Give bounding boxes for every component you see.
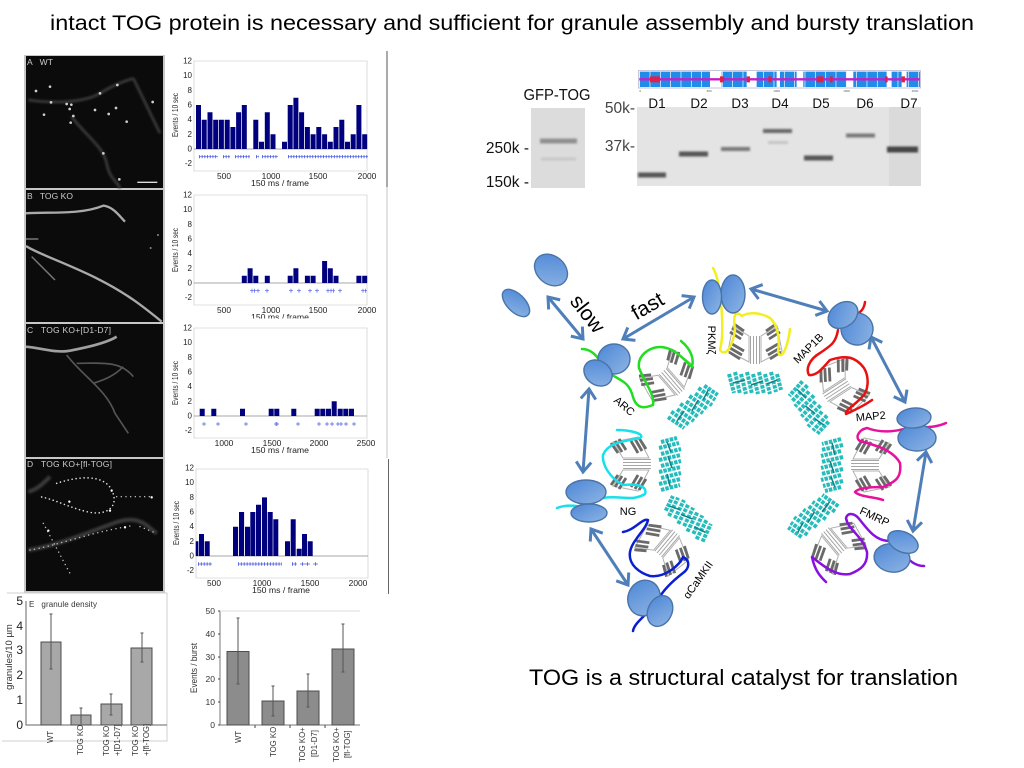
gel: GFP-TOG: GFP-TOG — [524, 87, 590, 104]
TOG dimer structures — [611, 324, 891, 581]
chart C: TOG KO+[D1-D7] events: 1000 — [215, 438, 234, 448]
mRNA labels: FMRP — [858, 505, 891, 529]
chart A: WT events: 6 — [188, 100, 193, 110]
chart D: TOG KO+[fl-TOG] events: 500 — [207, 578, 221, 588]
rate labels: fast — [627, 288, 668, 325]
micrograph B: TOG KO — [26, 190, 163, 322]
title: intact TOG protein is necessary and sufficient for granule assembly and bursty translation — [50, 12, 974, 35]
chart D: TOG KO+[fl-TOG] events: 6 — [190, 508, 195, 516]
diagram: TOG catalytic cycle — [498, 248, 946, 631]
rate labels: slow — [565, 290, 610, 338]
chart D: TOG KO+[fl-TOG] events: 0 — [190, 552, 195, 560]
domain map bar: 1500 — [843, 89, 850, 93]
chart A: WT events: 2 — [188, 130, 193, 139]
gel: domains D1-D7: D4 — [771, 96, 789, 111]
ribosome subunits — [498, 248, 936, 631]
micrograph D: TOG KO+[fl-TOG]: D TOG KO+[fl-TOG] — [27, 459, 112, 469]
chart E: granule density: 4 — [16, 619, 23, 633]
gel: domains D1-D7: 37k- — [605, 138, 635, 155]
domain map bar: 500 — [707, 89, 712, 93]
chart F: events per burst: 50 — [206, 606, 215, 616]
micrograph C: TOG KO+[D1-D7] — [26, 324, 163, 457]
chart A: WT events: 12 — [183, 56, 193, 66]
micrograph C: TOG KO+[D1-D7]: C TOG KO+[D1-D7] — [27, 325, 111, 335]
chart B: TOG KO events: 150 ms / frame — [251, 312, 309, 322]
chart A: WT events: -2 — [185, 159, 193, 168]
gel: domains D1-D7: D1 — [648, 96, 666, 111]
chart D: TOG KO+[fl-TOG] events: 2000 — [349, 578, 368, 588]
gel: domains D1-D7: D6 — [856, 96, 874, 111]
gel: domains D1-D7: D5 — [812, 96, 830, 111]
chart F: events per burst: WT — [234, 731, 243, 743]
chart C: TOG KO+[D1-D7] events: 12 — [183, 324, 193, 332]
chart D: TOG KO+[fl-TOG] events: 2 — [190, 537, 195, 546]
rate labels — [565, 288, 668, 338]
chart B: TOG KO events: 8 — [188, 220, 193, 229]
domain map bar — [638, 71, 921, 93]
chart E: granule density — [2, 593, 167, 756]
mRNA: NG — [557, 430, 645, 508]
micrograph B: TOG KO: B TOG KO — [27, 191, 73, 201]
chart A: WT events: 1000 — [262, 171, 281, 181]
chart E: granule density: 1 — [16, 693, 23, 707]
chart F: events per burst: 30 — [206, 652, 215, 662]
chart D: TOG KO+[fl-TOG] events: 1000 — [253, 578, 272, 588]
mRNA: αCaMKII — [623, 520, 688, 631]
chart B: TOG KO events: 1500 — [309, 305, 328, 315]
chart A: WT events: 8 — [188, 86, 193, 95]
chart E: granule density: +[D1-D7] — [113, 725, 122, 756]
chart A: WT events: 4 — [188, 115, 193, 124]
chart B: TOG KO events: 0 — [188, 278, 193, 288]
chart A: WT events: 0 — [188, 144, 193, 154]
chart E: granule density: +[fl-TOG] — [142, 724, 151, 756]
divider lines — [386, 51, 388, 187]
chart F: events per burst: 20 — [206, 674, 215, 684]
chart B: TOG KO events: 1000 — [262, 305, 281, 315]
micrograph D: TOG KO+[fl-TOG] — [26, 459, 163, 591]
chart F: events per burst: TOG KO — [269, 727, 278, 757]
chart E: granule density: TOG KO — [102, 726, 111, 756]
mRNA: PKMζ — [713, 268, 790, 355]
gel: GFP-TOG: 250k - — [486, 140, 529, 157]
chart C: TOG KO+[D1-D7] events: 0 — [188, 412, 193, 420]
chart B: TOG KO events — [171, 190, 377, 326]
chart F: events per burst: 10 — [206, 697, 215, 707]
caption: TOG is a structural catalyst for translation — [529, 665, 958, 690]
chart F: events per burst: TOG KO+ — [332, 727, 341, 762]
chart C: TOG KO+[D1-D7] events: 8 — [188, 353, 193, 362]
chart A: WT events: 150 ms / frame — [251, 178, 309, 188]
chart B: TOG KO events: Events / 10 sec — [171, 228, 180, 272]
mRNA: ARC — [582, 341, 693, 407]
gel: GFP-TOG: 150k - — [486, 174, 529, 191]
chart A: WT events: Events / 10 sec — [171, 93, 180, 137]
chart C: TOG KO+[D1-D7] events: 2000 — [310, 438, 329, 448]
mRNA: FMRP — [812, 514, 924, 582]
chart B: TOG KO events: 4 — [188, 249, 193, 258]
chart C: TOG KO+[D1-D7] events: -2 — [185, 426, 193, 435]
chart C: TOG KO+[D1-D7] events: 6 — [188, 368, 193, 376]
chart D: TOG KO+[fl-TOG] events: 10 — [185, 478, 195, 487]
chart D: TOG KO+[fl-TOG] events: 150 ms / frame — [252, 585, 310, 595]
chart E: granule density: E granule density — [29, 600, 97, 609]
micrograph A: WT: A WT — [27, 57, 53, 67]
gel: domains D1-D7 — [605, 96, 921, 186]
chart C: TOG KO+[D1-D7] events: 2 — [188, 397, 193, 406]
chart C: TOG KO+[D1-D7] events: 4 — [188, 382, 193, 391]
chart D: TOG KO+[fl-TOG] events: Events / 10 sec — [172, 501, 181, 545]
mRNA labels: MAP2 — [855, 410, 886, 424]
chart A: WT events: 10 — [183, 71, 193, 80]
chart B: TOG KO events: 6 — [188, 234, 193, 244]
chart E: granule density: 5 — [16, 594, 23, 608]
chart D: TOG KO+[fl-TOG] events: 4 — [190, 522, 195, 531]
chart F: events per burst: [fl-TOG] — [343, 730, 352, 758]
gel: domains D1-D7: D3 — [731, 96, 749, 111]
mRNA labels: NG — [620, 506, 636, 518]
chart C: TOG KO+[D1-D7] events: 2500 — [357, 438, 376, 448]
chart B: TOG KO events: 2 — [188, 264, 193, 273]
chart B: TOG KO events: 10 — [183, 205, 193, 214]
chart C: TOG KO+[D1-D7] events: Events / 10 sec — [171, 361, 180, 405]
chart C: TOG KO+[D1-D7] events: 1500 — [263, 438, 282, 448]
chart E: granule density: 2 — [16, 668, 23, 682]
mRNA labels: MAP1B — [791, 331, 826, 366]
mRNA: MAP1B — [808, 302, 872, 414]
chart D: TOG KO+[fl-TOG] events: 12 — [185, 464, 195, 472]
chart B: TOG KO events: 500 — [217, 305, 231, 315]
chart D: TOG KO+[fl-TOG] events: -2 — [187, 566, 195, 575]
mRNA: MAP2 — [855, 423, 946, 500]
chart D: TOG KO+[fl-TOG] events: 1500 — [301, 578, 320, 588]
chart E: granule density: WT — [46, 731, 55, 743]
chart A: WT events: 2000 — [358, 171, 377, 181]
domain map bar: 1000 — [773, 89, 780, 93]
chart C: TOG KO+[D1-D7] events: 150 ms / frame — [251, 445, 309, 455]
mRNA labels: αCaMKII — [681, 559, 716, 601]
mRNA labels — [611, 326, 891, 601]
chart B: TOG KO events: 12 — [183, 190, 193, 200]
chart A: WT events: 500 — [217, 171, 231, 181]
domain map bar: 0 — [639, 89, 641, 93]
chart D: TOG KO+[fl-TOG] events: 8 — [190, 493, 195, 502]
chart F: events per burst: 0 — [210, 720, 215, 730]
chart E: granule density: 0 — [16, 718, 23, 732]
mRNA labels: ARC — [611, 395, 637, 419]
chart A: WT events — [171, 56, 377, 188]
domain map bar: 2000 — [912, 89, 919, 93]
chart F: events per burst: [D1-D7] — [310, 730, 319, 757]
chart F: events per burst — [189, 606, 360, 762]
chart E: granule density: granules/10 µm — [4, 624, 15, 690]
micrograph A: WT — [26, 56, 163, 188]
gel: GFP-TOG — [486, 87, 590, 191]
chart C: TOG KO+[D1-D7] events — [171, 324, 376, 455]
chart B: TOG KO events: 2000 — [358, 305, 377, 315]
chart E: granule density: 3 — [16, 643, 23, 657]
arrows between granule states — [548, 289, 926, 585]
chart B: TOG KO events: -2 — [185, 293, 193, 302]
chart D: TOG KO+[fl-TOG] events — [172, 464, 368, 595]
chart A: WT events: 1500 — [309, 171, 328, 181]
chart F: events per burst: 40 — [206, 629, 215, 639]
gel: domains D1-D7: 50k- — [605, 100, 635, 117]
chart F: events per burst: TOG KO+ — [298, 727, 307, 762]
chart E: granule density: TOG KO — [131, 726, 140, 756]
chart C: TOG KO+[D1-D7] events: 10 — [183, 338, 193, 347]
gel: domains D1-D7: D2 — [690, 96, 708, 111]
gel: domains D1-D7: D7 — [900, 96, 918, 111]
mRNA labels: PKMζ — [705, 326, 717, 354]
chart E: granule density: TOG KO — [76, 725, 85, 755]
chart F: events per burst: Events / burst — [189, 643, 199, 693]
panel: micrographs — [24, 55, 165, 593]
